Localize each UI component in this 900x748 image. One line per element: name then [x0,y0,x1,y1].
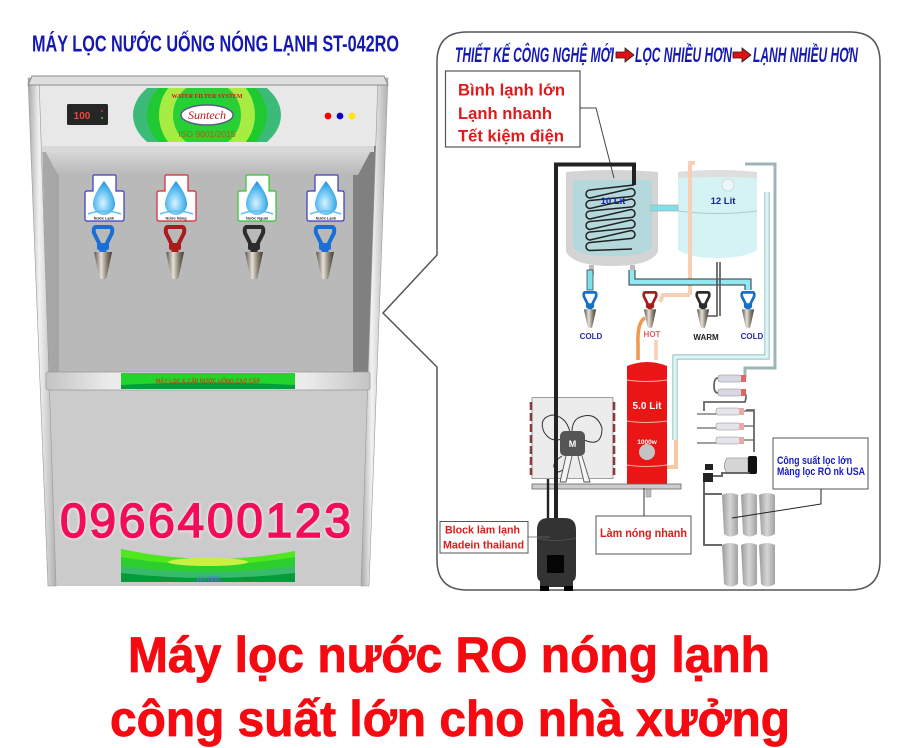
machine body lower panel [46,388,370,586]
tap label: warm: Nước Nguội [246,216,268,220]
green logo badge [133,88,281,142]
digital display: 100 [74,111,91,122]
recessed back wall [42,145,376,374]
faucet labels: COLD [580,332,603,341]
shelf [532,484,681,489]
tap label: cold 2: Nước Lạnh [316,216,337,220]
faucet: hot [644,292,656,328]
heading arrow 1 [616,48,634,62]
digital display [67,104,108,125]
tap label: hot: Nước Nóng [165,216,187,220]
hot water tubes [638,318,645,360]
diagram heading: THIẾT KẾ CÔNG NGHỆ MỚI [455,43,615,67]
tap label: hot [157,175,196,221]
bottom headline: Máy lọc nước RO nóng lạnh [128,627,770,683]
bottom headline [110,627,790,747]
diagram heading [455,43,858,67]
faucet labels: COLD [741,332,764,341]
callout: cold tank: Lạnh nhanh [458,105,552,123]
booster pump [703,456,757,545]
indicator lights [325,113,355,119]
green logo badge: ISO 9001/2015 [178,129,236,139]
tap label: cold: Nước Lạnh [94,216,115,220]
callout: compressor: Block làm lạnh [445,524,520,536]
orange return pipe [660,163,695,302]
right side rail [361,78,388,586]
connector between tanks [651,205,678,211]
bottom headline: công suất lớn cho nhà xưởng [110,691,790,747]
cold outlet pipe [587,270,593,290]
machine title: MÁY LỌC NƯỚC UỐNG NÓNG LẠNH ST-042RO [32,30,399,56]
upper hood [42,145,374,175]
pale tube into hot tank [667,440,676,467]
diagram heading: LỌC NHIỀU HƠN [635,44,732,67]
bottom green plate [121,549,295,583]
cold water manifold [632,270,748,290]
bottom green plate: WATER [196,576,220,583]
faucet: blue [94,227,112,279]
fan motor [560,431,585,456]
cold tank [566,170,658,275]
condenser with fan: M [569,439,576,449]
feed water pipes [675,164,775,440]
green logo badge: WATER FILTER SYSTEM [171,94,243,100]
callout: filtration capacity: Màng lọc RO nk USA [777,466,865,478]
faucet: black [245,227,263,279]
front shelf strip [46,372,370,390]
green logo badge: Suntech [188,108,226,122]
condenser with fan [531,398,614,482]
cooling coil [586,185,635,250]
faucet: warm [697,292,709,328]
faucet labels: HOT [644,330,661,339]
callout: filtration capacity [773,438,868,489]
faucet labels: WARM [693,333,719,342]
compressor [537,518,576,591]
red hot water tank: 5.0 Lit [633,401,662,412]
top cap [28,76,388,85]
tap label: warm [238,175,276,221]
RO filter housings: top row [722,493,775,536]
warm outlet pipe [706,262,720,316]
water dispenser machine [28,69,388,586]
cold tank: 10 Lit [601,196,626,207]
faucet: cold [584,292,596,328]
tap label: cold [85,175,124,221]
callout: fast heating: Làm nóng nhanh [600,528,687,540]
faucet: cold 2 [742,292,754,328]
callout: fast heating [596,516,691,554]
callout: compressor [440,522,528,553]
refrigerant pipes [547,479,549,518]
callout: cold tank: Bình lạnh lớn [458,82,565,100]
leader line: cold tank [580,108,614,178]
warm tank [678,170,757,258]
diagram panel outline with pointer [383,32,880,590]
faucet: blue 2 [316,227,334,279]
callout: cold tank [446,71,580,147]
callout: compressor: Madein thailand [443,540,524,552]
front shelf strip: MÁY LỌC & CẤP NƯỚC UỐNG CAO CẤP [156,375,261,385]
top control panel [38,85,378,146]
callout: cold tank: Tết kiệm điện [458,128,564,146]
red hot water tank: 1000w [637,439,658,446]
faucet: red [166,227,184,279]
faucet labels [580,330,764,342]
red hot water tank [627,362,667,497]
callout: filtration capacity: Công suất lọc lớn [777,455,852,467]
tap label: cold 2 [307,175,344,221]
left side rail [28,78,56,586]
heading arrow 2 [733,48,751,62]
post filters [697,375,754,452]
RO filter housings: bottom row [722,543,775,586]
phone number: 0966400123 [60,495,351,548]
warm tank: 12 Lit [711,196,736,207]
